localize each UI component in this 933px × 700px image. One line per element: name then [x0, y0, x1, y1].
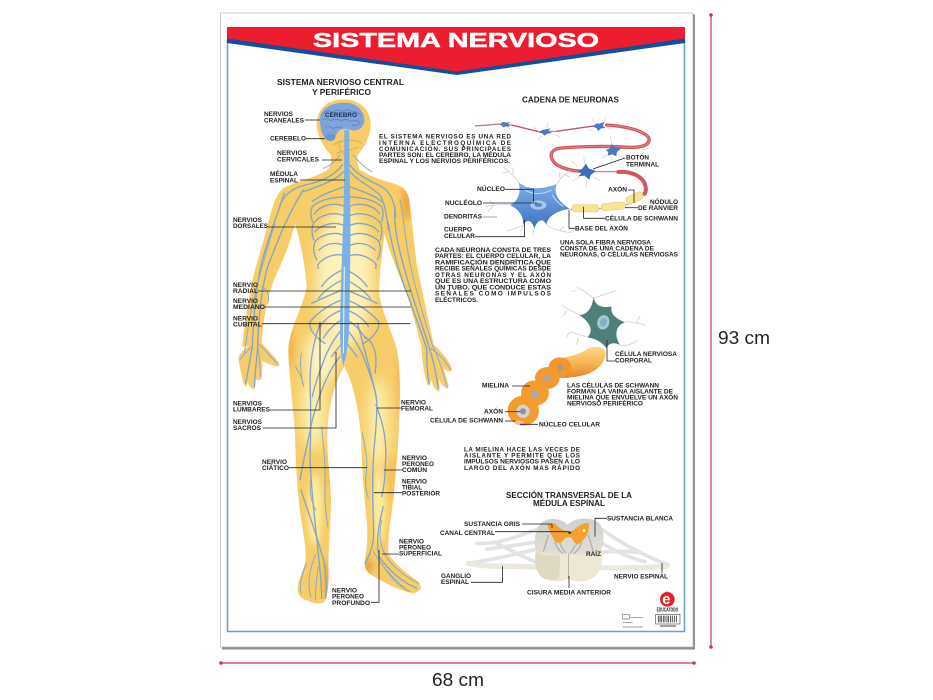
label: nervio peroneo superficial — [382, 538, 442, 558]
text block: schwann cells: MIELINA QUE ENVUELVE UN AXÓN — [567, 393, 678, 402]
label: nervio peroneo superficial: SUPERFICIAL — [399, 551, 442, 558]
label: nervio femoral: FEMORAL — [401, 405, 433, 412]
heading: central and peripheral nervous system: SISTEMA NERVIOSO CENTRAL — [277, 77, 404, 87]
label: núcleo celular — [520, 419, 600, 428]
heading: spinal cord cross-section — [506, 489, 632, 508]
logo: educatodo: e — [662, 592, 670, 608]
label: sustancia gris: SUSTANCIA GRIS — [464, 521, 521, 528]
label: dendritas: DENDRITAS — [444, 213, 483, 220]
label: nervios craneales: NERVIOS — [264, 111, 294, 118]
poster sheet — [220, 13, 695, 650]
label: nervios dorsales — [233, 217, 336, 230]
label: nervio espinal — [614, 563, 668, 581]
text block: schwann cells: NERVIOSO PERIFÉRICO — [567, 399, 643, 408]
label: axón (myelin diagram) — [484, 406, 520, 415]
label: nervio mediano: MEDIANO — [233, 304, 265, 311]
dimension: width: 68 cm — [432, 670, 484, 690]
label: botón terminal: TERMINAL — [626, 161, 659, 168]
title banner — [227, 27, 685, 75]
label: nervio tibial posterior: TIBIAL — [402, 484, 422, 491]
label: mielina — [482, 382, 530, 389]
nerves: right leg and foot — [358, 323, 418, 592]
dimension: height: 93 cm — [718, 328, 770, 348]
label: nervio peroneo común: PERONEO — [402, 461, 434, 468]
text block: neuron parts: UN TUBO, QUE CONDUCE ESTAS — [435, 284, 551, 291]
label: nervio tibial posterior — [374, 478, 440, 497]
label: sustancia blanca — [595, 516, 673, 537]
label: médula espinal: ESPINAL — [270, 177, 298, 184]
label: base del axón — [569, 210, 628, 232]
label: médula espinal — [270, 169, 345, 184]
label: cerebro: CEREBRO — [325, 112, 357, 119]
label: sustancia gris — [464, 521, 552, 528]
label: célula de schwann (myelin diagram) — [430, 416, 515, 425]
small neurons — [500, 122, 621, 180]
text block: single nerve fibre: NEURONAS, O CÉLULAS NERVIOSAS — [560, 250, 678, 259]
heading: central and peripheral nervous system — [277, 77, 404, 97]
label: nervio femoral: NERVIO — [401, 399, 426, 406]
label: ganglio espinal: ESPINAL — [441, 579, 469, 586]
brain — [320, 103, 364, 141]
label: nervio peroneo superficial: PERONEO — [399, 544, 431, 551]
label: célula nerviosa corporal: CÉLULA NERVIOSA — [615, 349, 677, 358]
label: nervios sacros: SACROS — [233, 425, 262, 432]
label: axón: AXÓN — [608, 185, 627, 194]
label: nervio cubital — [233, 315, 410, 328]
label: nervios sacros — [233, 352, 336, 432]
label: nódulo de ranvier: NÓDULO — [650, 197, 678, 206]
label: nervios lumbares: NERVIOS — [233, 401, 263, 408]
text block: myelin insulation — [464, 446, 580, 472]
text block: neuron parts: PARTES: EL CUERPO CELULAR, LA — [435, 253, 551, 260]
body silhouette — [238, 99, 452, 603]
label: nervio ciático: CIÁTICO — [262, 463, 289, 472]
label: botón terminal — [593, 153, 659, 169]
label: cuerpo celular — [444, 220, 524, 240]
label: nervio peroneo superficial: NERVIO — [399, 538, 424, 545]
label: nervio peroneo profundo — [332, 550, 379, 607]
label: cisura media anterior: CISURA MEDIA ANTERIOR — [527, 590, 611, 597]
face detail — [333, 140, 362, 155]
nerve roots — [468, 528, 668, 568]
label: célula nerviosa corporal: CORPORAL — [615, 357, 652, 364]
text block: schwann cells — [567, 380, 678, 408]
nerves: pelvis left — [310, 270, 342, 397]
spinal cord — [340, 130, 350, 366]
text block: neuron parts: ELÉCTRICOS. — [435, 295, 478, 304]
nerves: right arm and hand — [388, 200, 450, 388]
label: canal central — [440, 530, 569, 537]
label: célula nerviosa corporal — [607, 340, 677, 364]
label: nervio mediano — [233, 298, 411, 311]
label: cerebelo — [270, 136, 325, 143]
label: nervio peroneo profundo: PROFUNDO — [332, 600, 370, 607]
label: nervio mediano: NERVIO — [233, 298, 258, 305]
text block: intro: PARTES SON: EL CEREBRO, LA MÉDULA — [379, 150, 511, 159]
large neuron — [485, 167, 572, 235]
label: cuerpo celular: CUERPO — [444, 227, 472, 234]
label: axón (myelin diagram): AXÓN — [484, 406, 503, 415]
label: cerebelo: CEREBELO — [270, 136, 306, 143]
label: nervio radial: NERVIO — [233, 282, 258, 289]
axon chain — [475, 124, 649, 212]
text block: neuron parts: CADA NEURONA CONSTA DE TRES — [435, 247, 551, 254]
text block: myelin insulation: AISLANTE Y PERMITE QUE LOS — [464, 453, 580, 460]
label: nervio peroneo profundo: NERVIO — [332, 588, 357, 595]
text block: neuron parts — [435, 247, 551, 304]
nerves: left arm and hand — [240, 190, 303, 387]
nerves: pelvis right (mirrored) — [346, 270, 379, 397]
label: nervio tibial posterior: POSTERIOR — [402, 490, 440, 497]
title: SISTEMA NERVIOSO — [313, 29, 599, 52]
label: nucléolo — [445, 198, 537, 207]
label: nervio ciático: NERVIO — [262, 459, 287, 466]
text block: myelin insulation: LARGO DEL AXÓN MAS RÁPIDO — [464, 463, 580, 472]
text block: neuron parts: OTRAS NEURONAS Y EL AXÓN — [435, 270, 551, 279]
heading: spinal cord cross-section: SECCIÓN TRANSVERSAL DE LA — [506, 489, 632, 500]
text block: intro: COMUNICACIÓN. SUS PRINCIPALES — [379, 144, 511, 153]
label: nervios dorsales: NERVIOS — [233, 217, 263, 224]
nerves: left leg and foot — [296, 323, 340, 600]
label: nervio tibial posterior: NERVIO — [402, 478, 427, 485]
inner blue border — [228, 40, 684, 632]
label: nódulo de ranvier — [625, 197, 678, 212]
label: nervios lumbares: LUMBARES — [233, 407, 271, 414]
label: nervios cervicales — [277, 150, 342, 164]
heading: spinal cord cross-section: MÉDULA ESPINAL — [533, 498, 605, 508]
text block: schwann cells: FORMAN LA VAINA AISLANTE DE — [567, 388, 673, 395]
logo: educatodo: EDUCATODO — [657, 608, 678, 614]
label: cuerpo celular: CELULAR — [444, 233, 475, 240]
label: nervios dorsales: DORSALES — [233, 223, 269, 230]
label: mielina: MIELINA — [482, 382, 509, 389]
label: cisura media anterior — [527, 576, 611, 597]
label: nervios craneales — [264, 111, 320, 124]
label: nódulo de ranvier: DE RANVIER — [638, 205, 678, 212]
label: botón terminal: BOTÓN — [626, 153, 649, 162]
text block: single nerve fibre: CONSTA DE UNA CADENA DE — [560, 246, 654, 253]
text block: neuron parts: SEÑALES COMO IMPULSOS — [435, 289, 551, 298]
cord body — [535, 519, 604, 581]
nerves: ribs left — [311, 187, 345, 268]
text block: myelin insulation: IMPULSOS NERVIOSOS PASEN A LO — [464, 459, 580, 466]
label: canal central: CANAL CENTRAL — [440, 530, 495, 537]
text block: single nerve fibre — [560, 240, 678, 259]
text block: neuron parts: RAMIFICACIÓN DENDRÍTICA QUE — [435, 258, 551, 266]
nerves: neck and shoulders — [280, 155, 396, 230]
label: axón — [608, 185, 634, 203]
text block: intro — [379, 134, 511, 165]
label: nervios cervicales: NERVIOS — [277, 150, 308, 157]
dendrites of chain neurons — [499, 117, 628, 188]
dimension: height — [709, 13, 770, 649]
label: nucléolo: NUCLÉOLO — [445, 198, 482, 207]
label: núcleo celular: NÚCLEO CELULAR — [539, 419, 600, 428]
text block: intro: EL SISTEMA NERVIOSO ES UNA RED — [379, 134, 511, 141]
label: base del axón: BASE DEL AXÓN — [575, 223, 628, 232]
diagram: neuron chain — [475, 117, 649, 235]
label: nervio espinal: NERVIO ESPINAL — [614, 574, 668, 581]
heading: central and peripheral nervous system: Y PERIFÉRICO — [312, 87, 371, 97]
label: célula de schwann — [584, 207, 678, 222]
diagram: spinal cord section — [468, 519, 668, 581]
text block: intro: INTERNA ELECTROQUÍMICA DE — [379, 138, 511, 147]
label: núcleo — [477, 184, 534, 202]
myelin sheath — [508, 347, 606, 426]
label: nervio peroneo profundo: PERONEO — [332, 594, 364, 601]
label: nervio peroneo común — [384, 455, 434, 474]
label: nervio peroneo común: NERVIO — [402, 455, 427, 462]
label: célula de schwann (myelin diagram): CÉLULA DE SCHWANN — [430, 416, 503, 425]
text block: schwann cells: LAS CÉLULAS DE SCHWANN — [567, 380, 659, 389]
label: ganglio espinal — [441, 566, 502, 586]
label: nervio cubital: CUBITAL — [233, 321, 262, 328]
diagram: myelinated neuron — [508, 287, 645, 426]
label: nervio cubital: NERVIO — [233, 315, 258, 322]
label: nervio radial: RADIAL — [233, 288, 258, 295]
label: raíz: RAÍZ — [586, 549, 601, 558]
human body with nerves — [238, 99, 452, 603]
label: nervio peroneo común: COMÚN — [402, 465, 427, 474]
heading: cadena de neuronas: CADENA DE NEURONAS — [522, 95, 619, 105]
text block: single nerve fibre: UNA SOLA FIBRA NERVIOSA — [560, 240, 651, 247]
text block: myelin insulation: LA MIELINA HACE LAS VECES DE — [464, 446, 580, 453]
dimension: width — [219, 661, 696, 690]
text block: neuron parts: RECIBE SEÑALES QUÍMICAS DESDE — [435, 264, 551, 273]
logo: educatodo — [623, 591, 680, 627]
text block: neuron parts: QUE ES UNA ESTRUCTURA COMO — [435, 278, 551, 285]
label: núcleo: NÚCLEO — [477, 184, 505, 193]
label: nervio ciático — [262, 459, 367, 472]
label: nervios cervicales: CERVICALES — [277, 157, 320, 164]
label: nervio radial — [233, 282, 411, 295]
nerves: ribs right (mirrored) — [349, 187, 383, 268]
label: nervios craneales: CRANEALES — [264, 117, 305, 124]
label: nervios sacros: NERVIOS — [233, 419, 263, 426]
label: nervio femoral — [377, 399, 433, 412]
green cell body — [562, 287, 645, 348]
label: médula espinal: MÉDULA — [270, 169, 298, 178]
label: célula de schwann: CÉLULA DE SCHWANN — [605, 213, 678, 222]
label: sustancia blanca: SUSTANCIA BLANCA — [607, 516, 673, 523]
label: nervios lumbares — [233, 322, 320, 414]
text block: intro: ESPINAL Y LOS NERVIOS PERIFÉRICOS. — [379, 156, 510, 165]
label: ganglio espinal: GANGLIO — [441, 573, 471, 580]
